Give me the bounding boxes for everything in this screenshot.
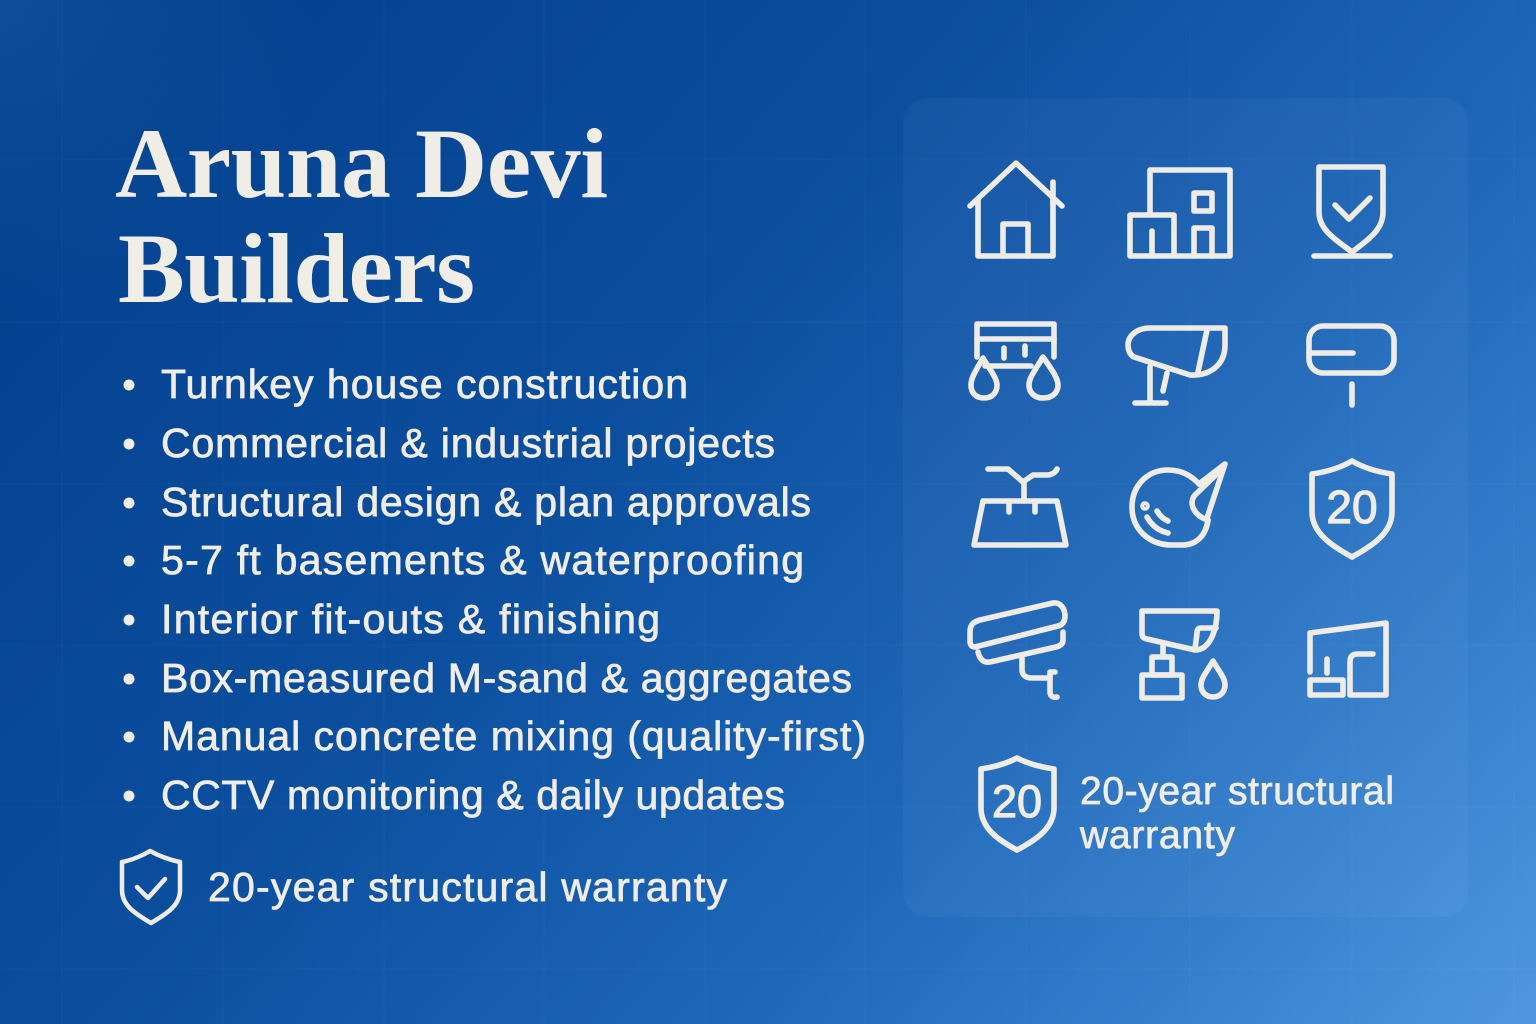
icon: shield 20 bbox=[1312, 461, 1392, 557]
list item: cctv: CCTV monitoring & daily updates bbox=[161, 772, 785, 818]
icon: floor plan bbox=[1310, 623, 1386, 695]
title: Aruna Devi bbox=[115, 108, 608, 219]
list item: turnkey: Turnkey house construction bbox=[161, 361, 688, 407]
icon: shield with check on base bbox=[1314, 167, 1390, 256]
icon: shield 20 large bbox=[981, 758, 1054, 850]
icon: paint scraper with drop bbox=[1142, 611, 1225, 698]
list item: commercial: Commercial & industrial projects bbox=[161, 420, 775, 466]
warranty text: warranty bbox=[1079, 814, 1236, 857]
icon: paint roller bbox=[1309, 326, 1394, 405]
list item: m-sand: Box-measured M-sand & aggregates bbox=[161, 655, 852, 701]
warranty block right bbox=[981, 758, 1394, 857]
services bullet list bbox=[124, 361, 866, 818]
warranty text bbox=[1079, 770, 1394, 857]
warranty text: 20-year structural bbox=[1080, 770, 1394, 813]
icon: shield check bbox=[122, 851, 180, 923]
icon: shield 20: 20 bbox=[1326, 481, 1378, 533]
icon: air vent with drops bbox=[971, 324, 1058, 398]
icon: buildings bbox=[1130, 170, 1230, 256]
warranty badge left bbox=[122, 851, 728, 923]
icon: ball with cone bbox=[1132, 464, 1225, 545]
icon: shield 20 large: 20 bbox=[992, 776, 1042, 827]
list item: basements: 5-7 ft basements & waterproofing bbox=[161, 537, 804, 583]
icon: camera on post bbox=[1128, 328, 1225, 403]
warranty text: 20-year structural warranty bbox=[208, 864, 728, 910]
icon: cctv camera bbox=[970, 603, 1065, 697]
list item: interior: Interior fit-outs & finishing bbox=[161, 596, 660, 642]
list item: concrete mixing: Manual concrete mixing (quality-first) bbox=[161, 713, 866, 759]
title: Builders bbox=[118, 213, 475, 324]
panel: icon grid bbox=[903, 98, 1468, 917]
title bbox=[115, 108, 608, 324]
icon: foundation with sprout bbox=[974, 469, 1066, 545]
list item: structural design: Structural design & plan approvals bbox=[161, 479, 811, 525]
icon: house bbox=[970, 163, 1062, 256]
